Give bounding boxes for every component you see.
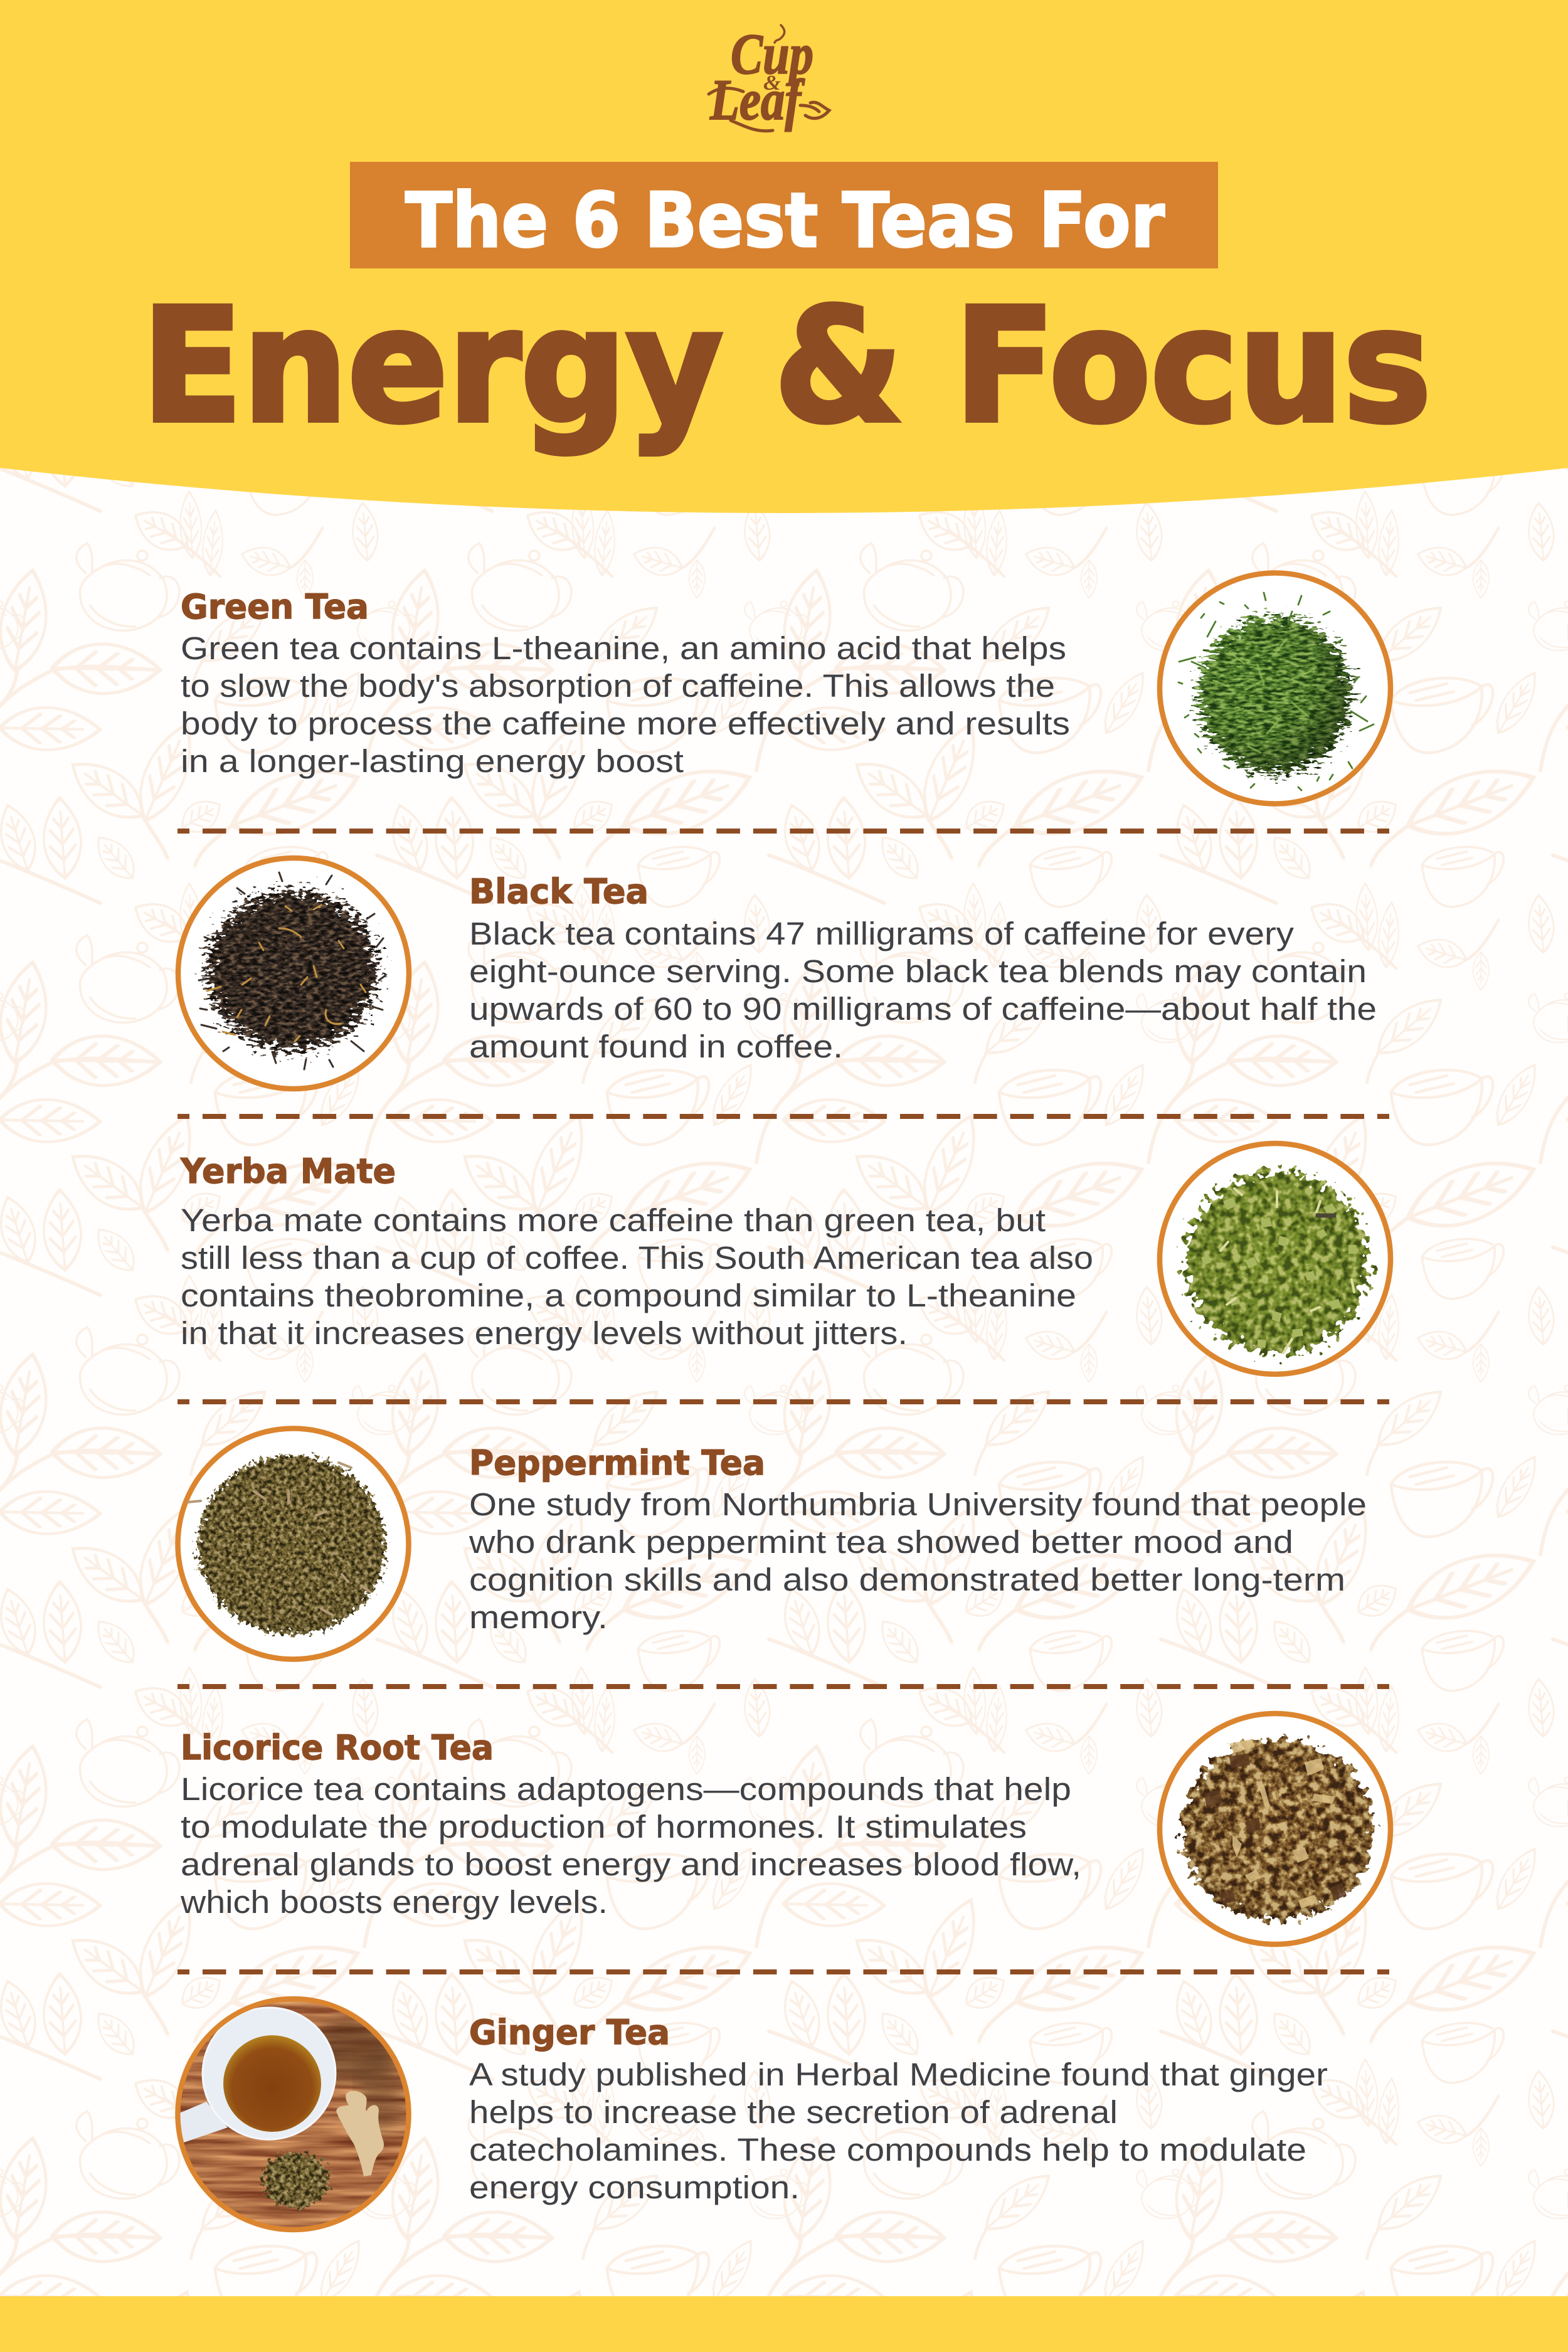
text: Green Tea description: body to process the caffeine more effectively and results: [181, 706, 1070, 741]
divider: [177, 829, 1389, 834]
text: Black Tea description: Black tea contains 47 milligrams of caffeine for every: [469, 916, 1295, 951]
tea liquid: [223, 2035, 321, 2132]
heading: Green Tea: Green Tea: [181, 587, 369, 627]
text: Black Tea description: amount found in coffee.: [469, 1029, 843, 1064]
photo: tea cup with ginger: [178, 1993, 409, 2230]
heading: Ginger Tea: Ginger Tea: [469, 2013, 670, 2052]
section: Green Tea: [181, 573, 1391, 804]
text: Ginger Tea description: A study published in Herbal Medicine found that ginger: [469, 2057, 1328, 2092]
text: Green Tea description: Green tea contains L-theanine, an amino acid that helps: [181, 630, 1066, 666]
photo: peppermint leaves: [178, 1429, 409, 1660]
divider: [177, 1969, 1389, 1974]
section: Ginger Tea: [178, 1993, 1328, 2230]
text: Peppermint Tea description: cognition skills and also demonstrated better long-term: [469, 1562, 1345, 1597]
heading: Black Tea: Black Tea: [469, 872, 649, 911]
text: Licorice Root Tea description: adrenal glands to boost energy and increases blood flow,: [181, 1846, 1081, 1882]
text: Black Tea description: [469, 916, 1377, 1064]
text: Licorice Root Tea description: [180, 1771, 1081, 1920]
text: Yerba Mate description: [181, 1202, 1093, 1351]
text: Yerba Mate description: in that it increases energy levels without jitters.: [181, 1315, 908, 1351]
ginger root: [336, 2091, 384, 2176]
text: Yerba Mate description: still less than a cup of coffee. This South American tea also: [181, 1240, 1093, 1276]
mug handle: [178, 2102, 228, 2143]
text: Black Tea description: eight-ounce serving. Some black tea blends may contain: [469, 953, 1367, 989]
divider: [177, 1114, 1389, 1119]
logo flourish and leaf: [709, 88, 829, 131]
text: Ginger Tea description: energy consumption.: [469, 2169, 800, 2205]
text: Licorice Root Tea description: which boosts energy levels.: [180, 1884, 608, 1920]
photo: yerba mate leaves: [1160, 1143, 1391, 1374]
logo: Cup & Leaf: [709, 22, 829, 132]
heading: Yerba Mate: Yerba Mate: [180, 1152, 396, 1191]
text: Peppermint Tea description: memory.: [469, 1599, 608, 1635]
photo: black tea leaves: [178, 858, 409, 1089]
section: Peppermint Tea: [178, 1429, 1367, 1660]
text: Black Tea description: upwards of 60 to 90 milligrams of caffeine—about half the: [469, 991, 1377, 1027]
section: Licorice Root Tea: [180, 1714, 1391, 1944]
text: Peppermint Tea description: who drank peppermint tea showed better mood and: [469, 1524, 1293, 1560]
text: Yerba Mate description: contains theobromine, a compound similar to L-theanine: [181, 1278, 1076, 1313]
heading: Peppermint Tea: Peppermint Tea: [469, 1443, 765, 1483]
logo: Cup & Leaf: &: [763, 72, 781, 95]
heading: Licorice Root Tea: Licorice Root Tea: [181, 1728, 494, 1767]
text: Licorice Root Tea description: Licorice tea contains adaptogens—compounds that help: [181, 1771, 1071, 1807]
mug: [202, 2006, 336, 2141]
title: Energy & Focus: Energy & Focus: [142, 275, 1431, 457]
text: Licorice Root Tea description: to modulate the production of hormones. It stimulates: [181, 1809, 1027, 1845]
logo: Cup & Leaf: Leaf: [709, 68, 805, 132]
footer bar: [0, 2296, 1568, 2352]
section: Yerba Mate: [180, 1143, 1391, 1374]
divider: [177, 1684, 1389, 1689]
text: Green Tea description: in a longer-lasting energy boost: [181, 743, 684, 779]
title banner: The 6 Best Teas For: The 6 Best Teas For: [405, 177, 1165, 265]
text: Ginger Tea description: catecholamines. These compounds help to modulate: [469, 2132, 1306, 2168]
text: Yerba Mate description: Yerba mate contains more caffeine than green tea, but: [181, 1202, 1046, 1238]
photo: licorice root: [1160, 1714, 1391, 1944]
herb pile: [262, 2153, 330, 2208]
text: Ginger Tea description: helps to increase the secretion of adrenal: [469, 2094, 1118, 2130]
text: Peppermint Tea description: [469, 1486, 1367, 1635]
section: Black Tea: [178, 858, 1377, 1089]
divider: [177, 1399, 1389, 1404]
text: Ginger Tea description: [469, 2057, 1328, 2205]
logo steam: [775, 25, 785, 43]
text: Green Tea description: to slow the body's absorption of caffeine. This allows the: [181, 668, 1055, 704]
text: Green Tea description: [181, 630, 1070, 779]
text: Peppermint Tea description: One study from Northumbria University found that people: [469, 1486, 1367, 1522]
photo: green tea leaves: [1160, 573, 1391, 804]
header banner: [0, 0, 1568, 513]
logo: Cup & Leaf: Cup: [731, 22, 813, 86]
